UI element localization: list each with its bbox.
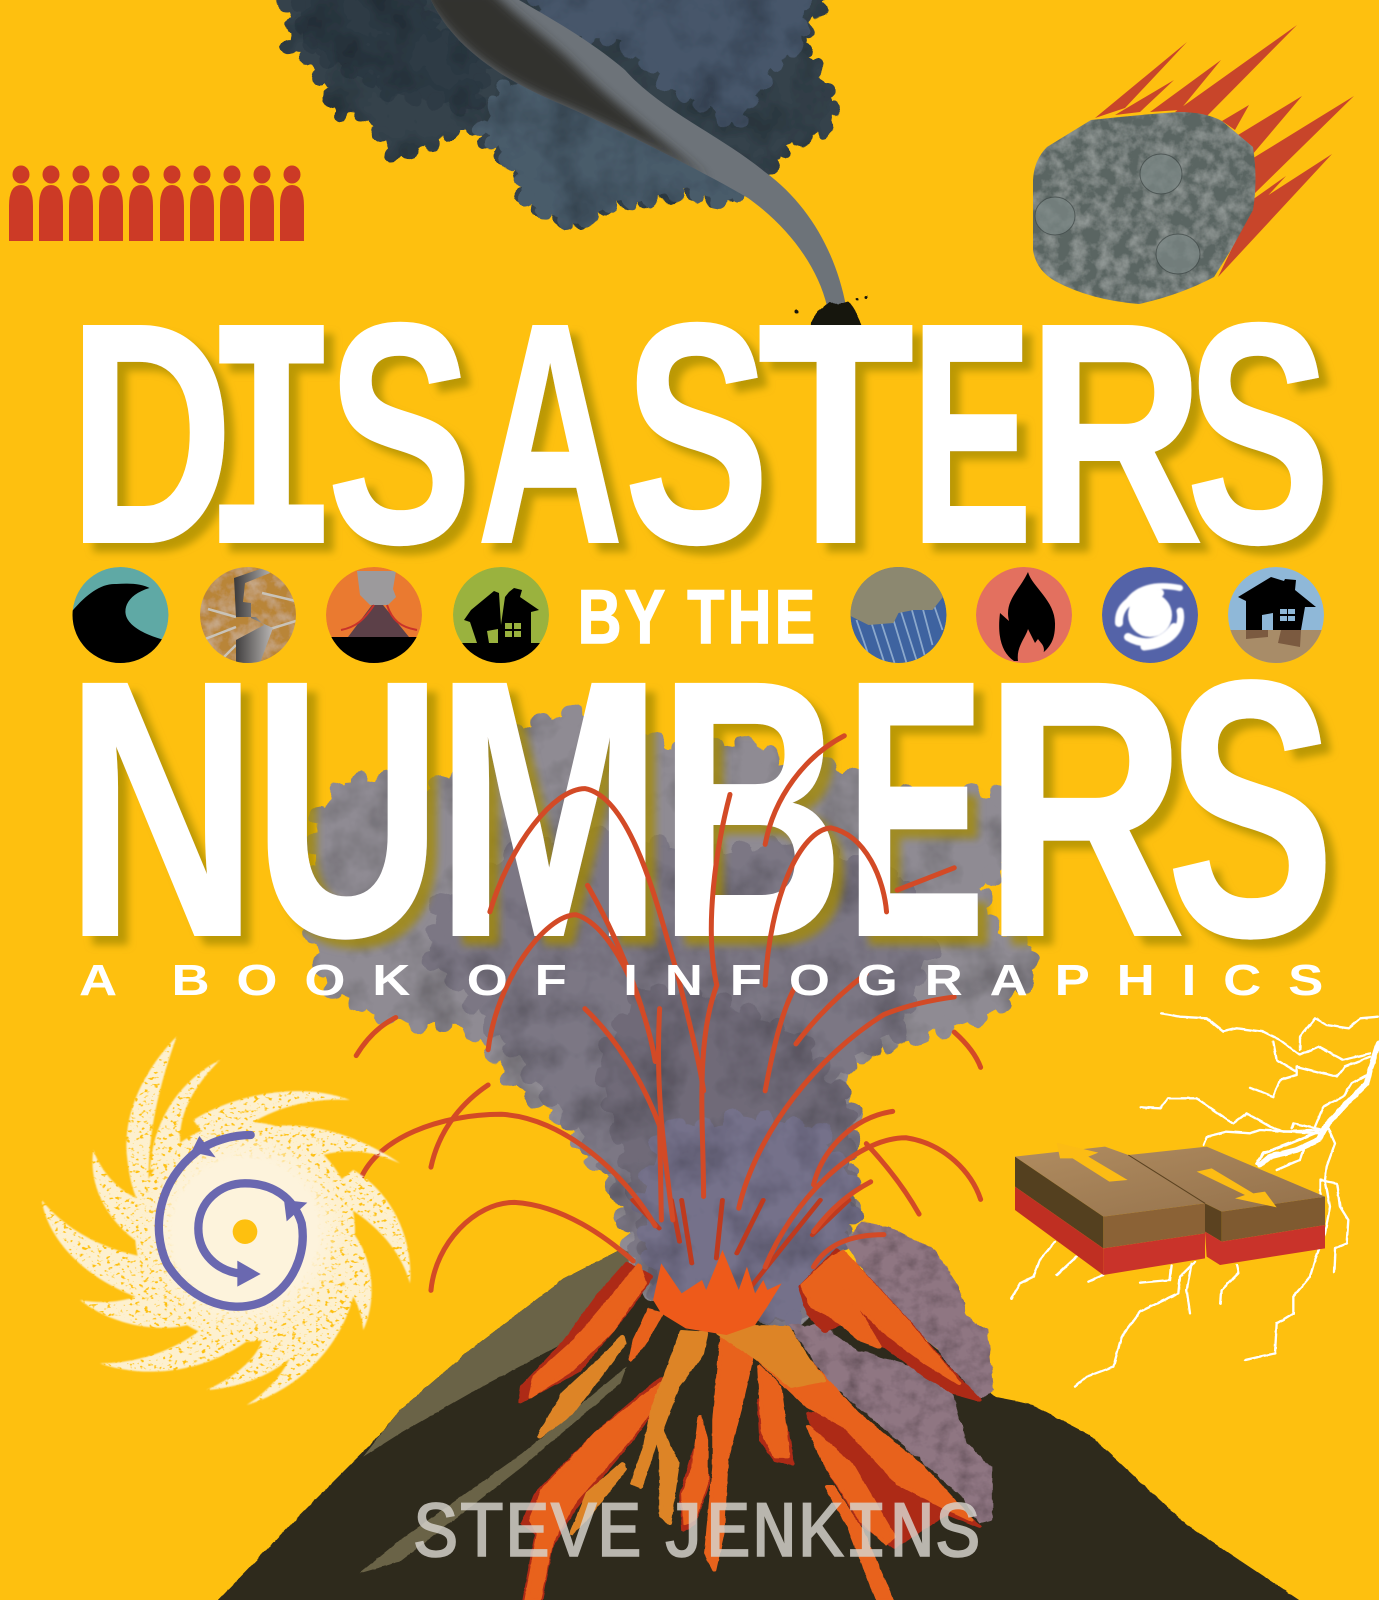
heading: BY THE: BY THE — [578, 575, 815, 660]
icon: earthquake crack — [200, 567, 296, 663]
icon: house on shifting ground — [1228, 567, 1324, 663]
ash cloud — [312, 715, 1033, 1320]
spiral cloud arms — [42, 1037, 410, 1405]
icon: collapsing house — [451, 567, 551, 665]
title word: DISASTERS: E — [911, 258, 1032, 609]
lava bombs arcs — [356, 736, 981, 1290]
lightning — [1012, 1013, 1378, 1387]
title word: NUMBERS: U — [253, 606, 442, 1013]
debris at tornado base — [794, 294, 868, 328]
title word: NUMBERS: M — [435, 606, 663, 1013]
eruption streaks — [633, 1200, 849, 1287]
icon: fire — [976, 567, 1072, 663]
lava flows: orange layer — [527, 1252, 971, 1600]
icon: tsunami — [72, 567, 168, 663]
title word: NUMBERS: R — [983, 606, 1186, 1013]
asteroid with flames — [1033, 25, 1354, 304]
storm cloud — [278, 0, 843, 224]
title word: DISASTERS: D — [68, 258, 233, 609]
hurricane diagram — [42, 1037, 410, 1405]
author name: STEVE JENKINS — [413, 1490, 981, 1581]
volcano mountain — [215, 1243, 1304, 1600]
olive ridge — [359, 1243, 645, 1573]
title block — [65, 258, 1335, 1013]
tectonic plates diagram — [1015, 1143, 1325, 1275]
icon: row of red people — [9, 166, 304, 241]
craters — [1035, 154, 1200, 274]
title word: DISASTERS: I — [202, 270, 341, 641]
pyroclastic clouds — [788, 1222, 994, 1523]
title word: DISASTERS: S — [327, 258, 472, 609]
title word: NUMBERS: E — [845, 606, 985, 1013]
pyroclastic flows and lava — [520, 1200, 994, 1600]
title word: DISASTERS: S — [624, 258, 769, 609]
title word: NUMBERS: N — [65, 606, 258, 1013]
title word: DISASTERS: R — [1027, 258, 1204, 609]
title word: NUMBERS: B — [658, 606, 844, 1013]
icon: hurricane — [1102, 567, 1198, 663]
tornado funnel — [420, 0, 868, 328]
hurricane eye — [233, 1219, 257, 1244]
plate motion arrows — [1057, 1143, 1128, 1182]
icon: flood rain — [848, 565, 948, 663]
title word: DISASTERS: T — [758, 258, 914, 609]
lava flows: amber layer — [539, 1327, 824, 1533]
lava flows: dark red underlayer — [520, 1250, 980, 1600]
title word: DISASTERS: A — [477, 258, 623, 609]
lava crown — [653, 1250, 782, 1335]
subtitle: A BOOK OF INFOGRAPHICS — [79, 956, 1323, 1005]
rotation arrows — [159, 1135, 303, 1307]
icon: volcano — [324, 567, 424, 667]
